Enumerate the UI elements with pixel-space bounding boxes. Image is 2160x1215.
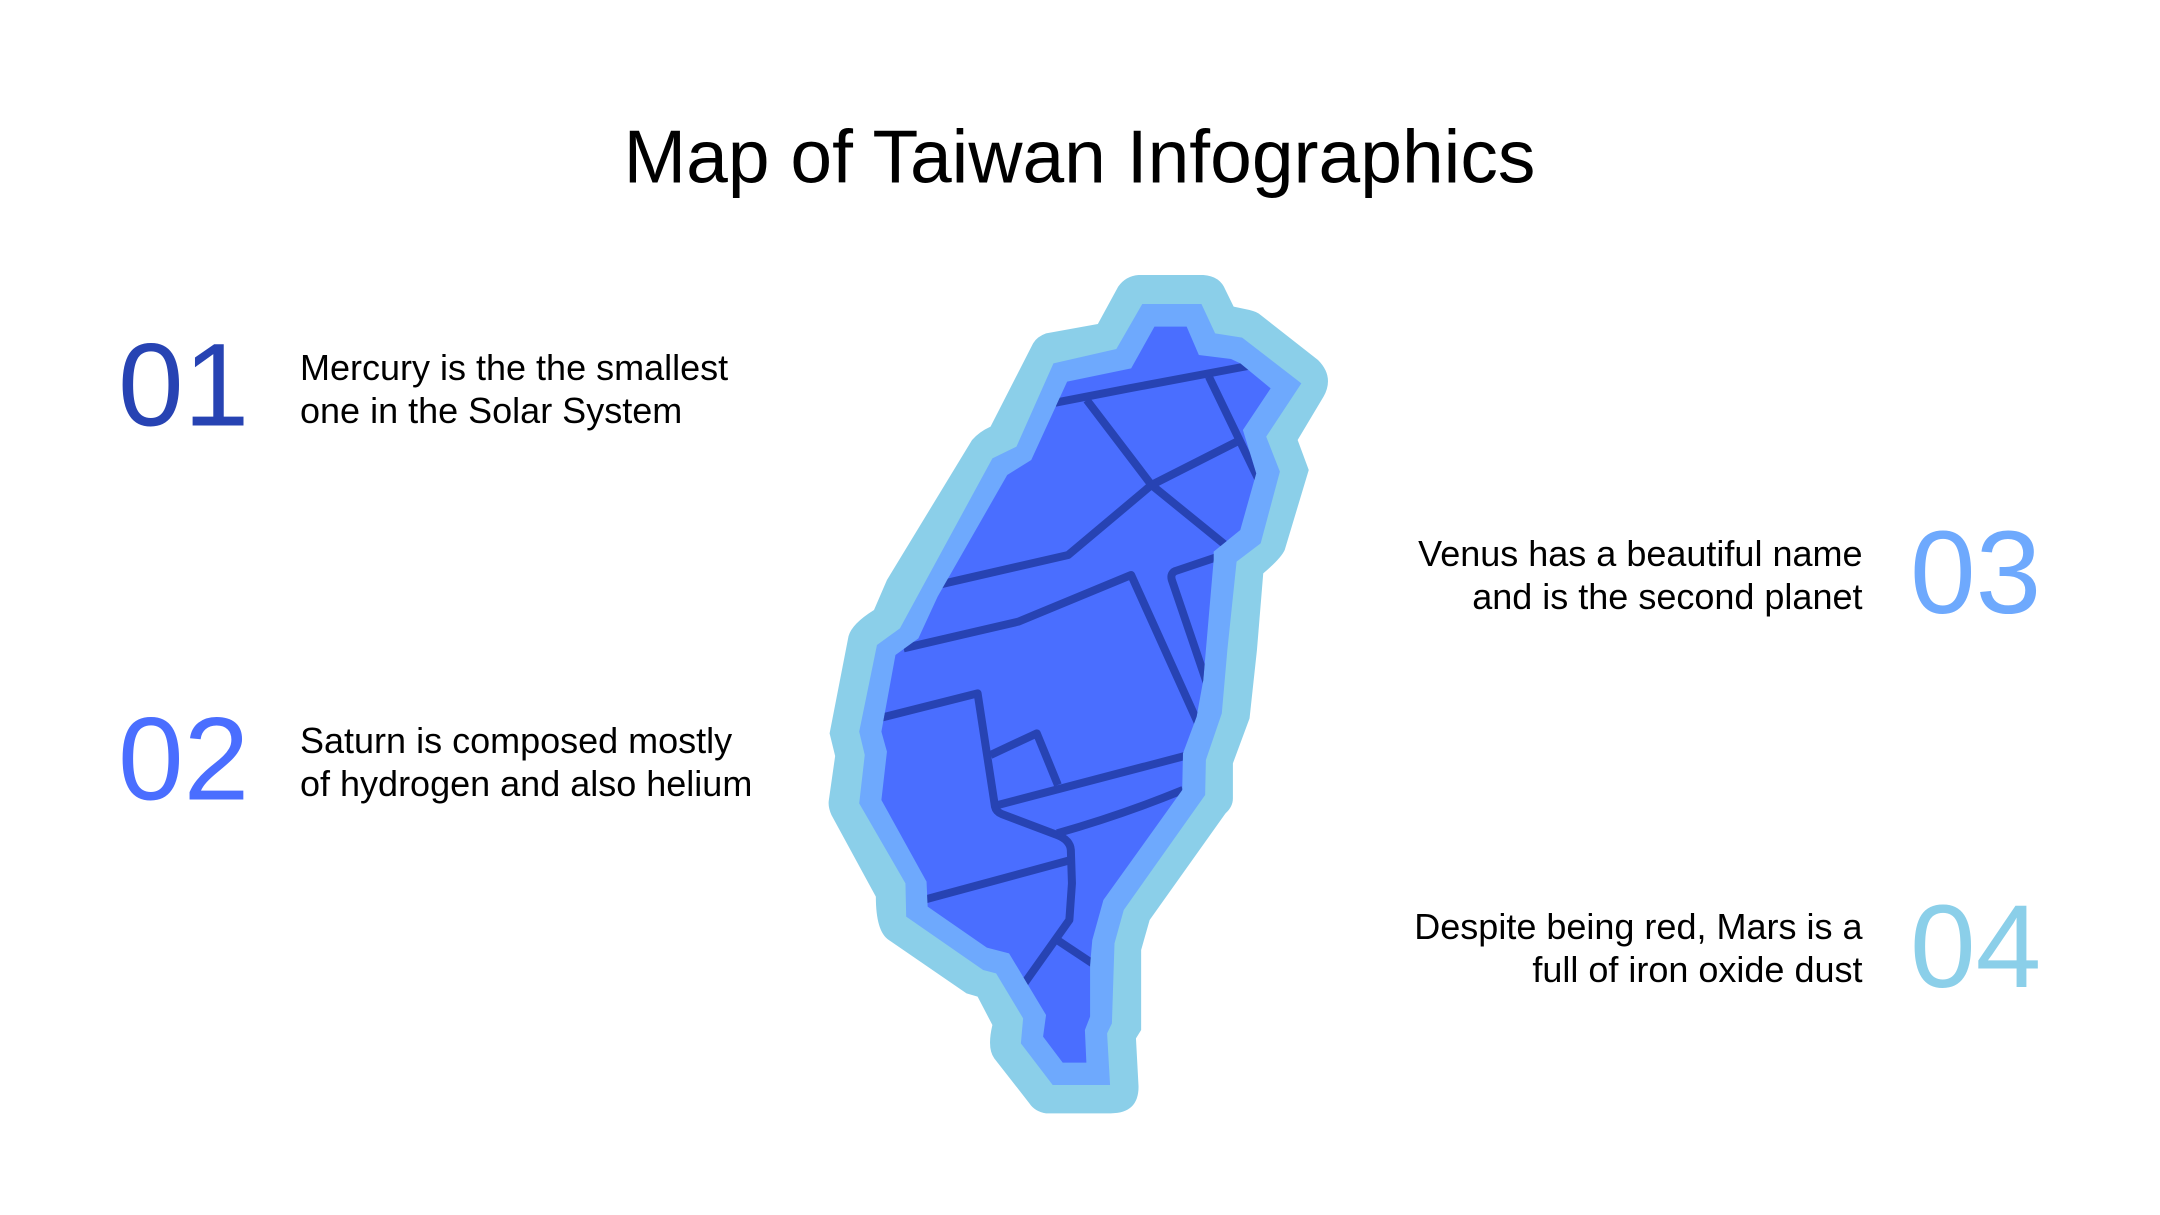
- number 04: 04: [1910, 881, 2041, 1013]
- title: Map of Taiwan Infographics: [624, 114, 1535, 198]
- number 01: 01: [118, 320, 249, 452]
- inner land: [881, 327, 1271, 1063]
- text 03: Venus has a beautiful name: [1418, 533, 1862, 574]
- text 03: and is the second planet: [1472, 576, 1862, 617]
- county borders: [881, 365, 1259, 987]
- item 03: [1418, 507, 2041, 639]
- item 01: [118, 320, 728, 452]
- map of Taiwan: [829, 275, 1328, 1113]
- text 03: [1418, 533, 1862, 617]
- text 01: [300, 347, 728, 431]
- number 03: 03: [1910, 507, 2041, 639]
- item 04: [1414, 881, 2041, 1013]
- text 04: [1414, 906, 1863, 990]
- middle band: [859, 304, 1301, 1085]
- text 02: Saturn is composed mostly: [300, 720, 732, 761]
- item 02: [118, 694, 752, 826]
- text 04: Despite being red, Mars is a: [1414, 906, 1863, 947]
- outer band: [829, 275, 1328, 1113]
- text 01: Mercury is the the smallest: [300, 347, 728, 388]
- text 04: full of iron oxide dust: [1532, 949, 1862, 990]
- text 02: of hydrogen and also helium: [300, 763, 752, 804]
- number 02: 02: [118, 694, 249, 826]
- text 02: [300, 720, 752, 804]
- text 01: one in the Solar System: [300, 390, 682, 431]
